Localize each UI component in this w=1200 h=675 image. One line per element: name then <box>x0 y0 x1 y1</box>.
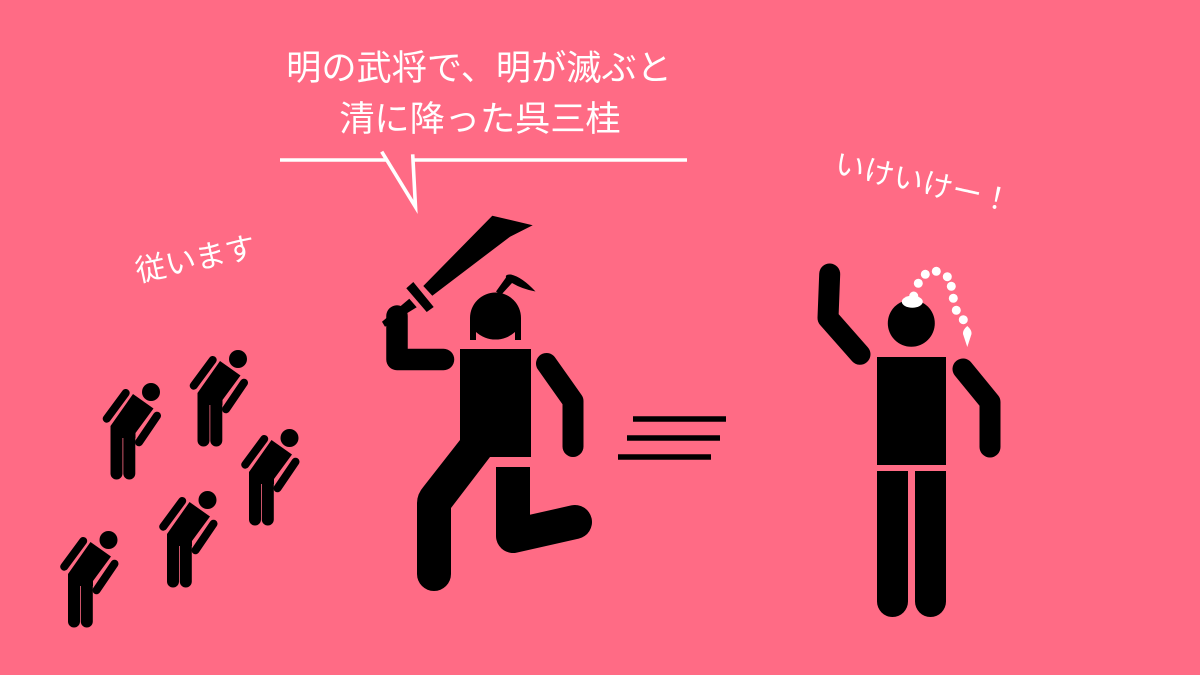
speech bubble line with tail <box>280 152 687 207</box>
bowing follower 2 <box>194 350 247 440</box>
speed lines <box>618 419 726 457</box>
raised arm <box>397 316 444 360</box>
icon: sword <box>382 216 533 327</box>
bowing follower 3 <box>245 429 298 520</box>
torso <box>877 357 946 465</box>
speech bubble text <box>286 49 672 139</box>
bowing follower 1 <box>107 383 160 474</box>
running back leg <box>417 440 490 591</box>
topknot <box>496 274 536 295</box>
head with hair <box>470 292 521 340</box>
raised arm <box>828 274 860 354</box>
speech bubble text: 明の武将で、明が滅ぶと <box>286 49 672 88</box>
torso <box>460 349 531 457</box>
bowing follower 5 <box>64 531 118 622</box>
commander figure <box>828 267 990 617</box>
legs <box>877 471 946 617</box>
lowered arm <box>963 369 990 447</box>
caption: followers: 従います <box>132 230 259 289</box>
caption: go go: いけいけー！ <box>831 148 1014 219</box>
icon: white hair plume <box>902 267 972 347</box>
bent front leg <box>496 467 575 536</box>
running general with sword <box>382 216 575 591</box>
lowered arm <box>546 364 573 446</box>
bowing follower 4 <box>163 491 216 582</box>
head <box>888 300 935 347</box>
speech bubble text: 清に降った呉三桂 <box>339 100 621 139</box>
